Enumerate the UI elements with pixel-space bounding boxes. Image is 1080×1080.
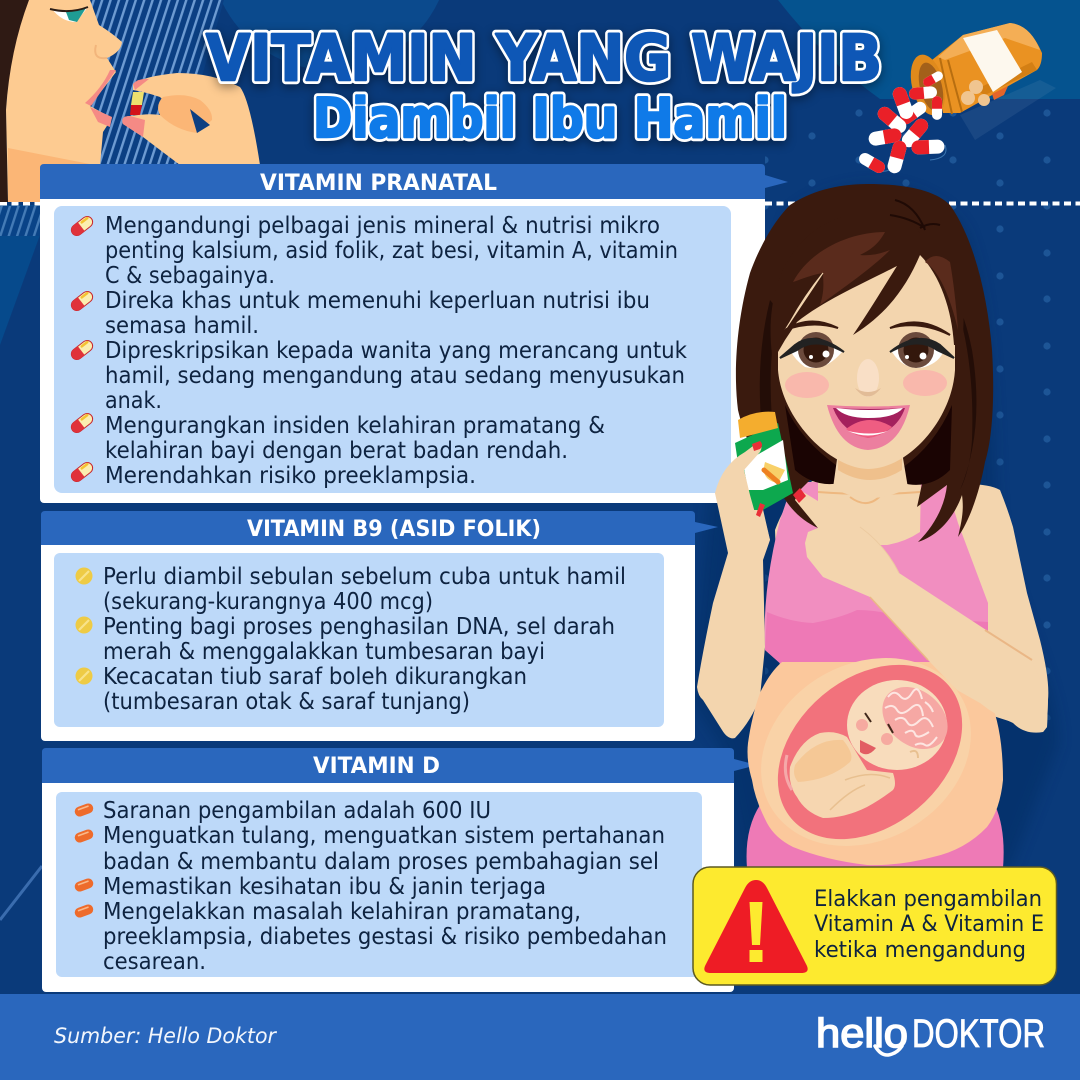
- bullet text: Saranan pengambilan adalah 600 IU: [103, 796, 491, 824]
- title: VITAMIN YANG WAJIB: [206, 22, 882, 95]
- eyes: [780, 321, 954, 368]
- bullet text: merah & menggalakkan tumbesaran bayi: [103, 637, 545, 665]
- illustration: woman taking a pill: [0, 0, 260, 202]
- bullet text: Mengelakkan masalah kelahiran pramatang,: [103, 897, 581, 925]
- callout: warning: [693, 867, 1056, 985]
- bullet text: Direka khas untuk memenuhi keperluan nutrisi ibu: [105, 286, 650, 314]
- bullet icons: [69, 214, 95, 484]
- hand with fingers: [715, 441, 770, 552]
- bullet icons: [76, 568, 92, 684]
- text box: [56, 792, 702, 977]
- hair fringe: [771, 200, 964, 355]
- bullet text: Dipreskripsikan kepada wanita yang merancang untuk: [105, 336, 687, 364]
- bullet text: C & sebagainya.: [105, 261, 275, 289]
- bullet text: (tumbesaran otak & saraf tunjang): [103, 687, 470, 715]
- logo: DOKTOR: [912, 1012, 1045, 1056]
- bullet text: Mengandungi pelbagai jenis mineral & nutrisi mikro: [105, 211, 660, 239]
- header ribbon: [41, 511, 718, 545]
- dashed divider: [0, 202, 1080, 206]
- top: [765, 480, 988, 665]
- mouth: [827, 405, 910, 450]
- bullet text: [103, 796, 667, 975]
- header ribbon: [42, 748, 757, 783]
- hatched panel: [0, 0, 224, 236]
- torso and upper arm: [775, 480, 1048, 732]
- icon: spilled pill bottle: [857, 23, 1056, 175]
- pointing arm: [793, 488, 1048, 733]
- heading: VITAMIN B9 (ASID FOLIK): [247, 517, 541, 542]
- pill: [130, 92, 144, 115]
- bullet text: Mengurangkan insiden kelahiran pramatang &: [105, 411, 605, 439]
- lower top: [747, 805, 1004, 868]
- bullet text: semasa hamil.: [105, 311, 259, 339]
- vitamin bottle: [735, 412, 793, 510]
- subtitle: Diambil Ibu Hamil: [313, 87, 787, 150]
- footer bar: [0, 994, 1080, 1080]
- hand: [122, 73, 260, 165]
- source: Sumber: Hello Doktor: [54, 1024, 277, 1048]
- heading: VITAMIN D: [313, 754, 440, 779]
- text box: [54, 553, 664, 727]
- womb: [744, 629, 996, 875]
- arm holding bottle: [697, 493, 770, 738]
- title: VITAMIN YANG WAJIB: [206, 22, 882, 95]
- bullet text: Merendahkan risiko preeklampsia.: [105, 461, 476, 489]
- bullet text: Menguatkan tulang, menguatkan sistem pertahanan: [103, 821, 665, 849]
- bullet text: hamil, sedang mengandung atau sedang menyusukan: [105, 361, 685, 389]
- bullet text: penting kalsium, asid folik, zat besi, vitamin A, vitamin: [105, 236, 678, 264]
- panel: vitamin pranatal: [40, 164, 788, 503]
- capsules: [857, 70, 945, 175]
- illustration: smiling pregnant woman: [697, 184, 1048, 883]
- header ribbon: [40, 164, 788, 199]
- baby brain: [870, 674, 960, 762]
- bullet text: anak.: [105, 386, 162, 414]
- bullet text: kelahiran bayi dengan berat badan rendah.: [105, 436, 568, 464]
- title: Diambil Ibu Hamil: [313, 87, 787, 150]
- bullet text: Perlu diambil sebulan sebelum cuba untuk hamil: [103, 562, 626, 590]
- icon: warning triangle: [704, 880, 808, 973]
- logo: [816, 1010, 1045, 1056]
- warning text: [814, 887, 1044, 963]
- bullet text: Kecacatan tiub saraf boleh dikurangkan: [103, 662, 527, 690]
- bullet text: [105, 211, 687, 489]
- bullet icons: [73, 802, 95, 919]
- cheeks: [785, 370, 947, 398]
- warning text: ketika mengandung: [814, 938, 1026, 963]
- nose: [855, 359, 881, 397]
- belly: [727, 621, 1005, 883]
- bullet text: (sekurang-kurangnya 400 mcg): [103, 587, 433, 615]
- baby: [785, 674, 960, 818]
- title: [206, 22, 882, 150]
- hair back: [736, 184, 993, 542]
- panel: vitamin b9: [41, 511, 718, 741]
- bullet text: cesarean.: [103, 947, 206, 975]
- bullet text: Penting bagi proses penghasilan DNA, sel darah: [103, 612, 615, 640]
- logo: hello: [816, 1010, 908, 1056]
- bullet text: badan & membantu dalam proses pembahagian sel: [103, 847, 659, 875]
- face: [778, 220, 955, 469]
- bullet text: preeklampsia, diabetes gestasi & risiko pembedahan: [103, 922, 667, 950]
- bullet text: Memastikan kesihatan ibu & janin terjaga: [103, 872, 546, 900]
- text box: [54, 206, 731, 493]
- heading: VITAMIN PRANATAL: [260, 171, 497, 196]
- neck: [833, 452, 908, 498]
- bullet text: [103, 562, 626, 715]
- warning text: Vitamin A & Vitamin E: [814, 912, 1044, 937]
- warning text: Elakkan pengambilan: [814, 887, 1042, 912]
- panel: vitamin d: [42, 748, 757, 992]
